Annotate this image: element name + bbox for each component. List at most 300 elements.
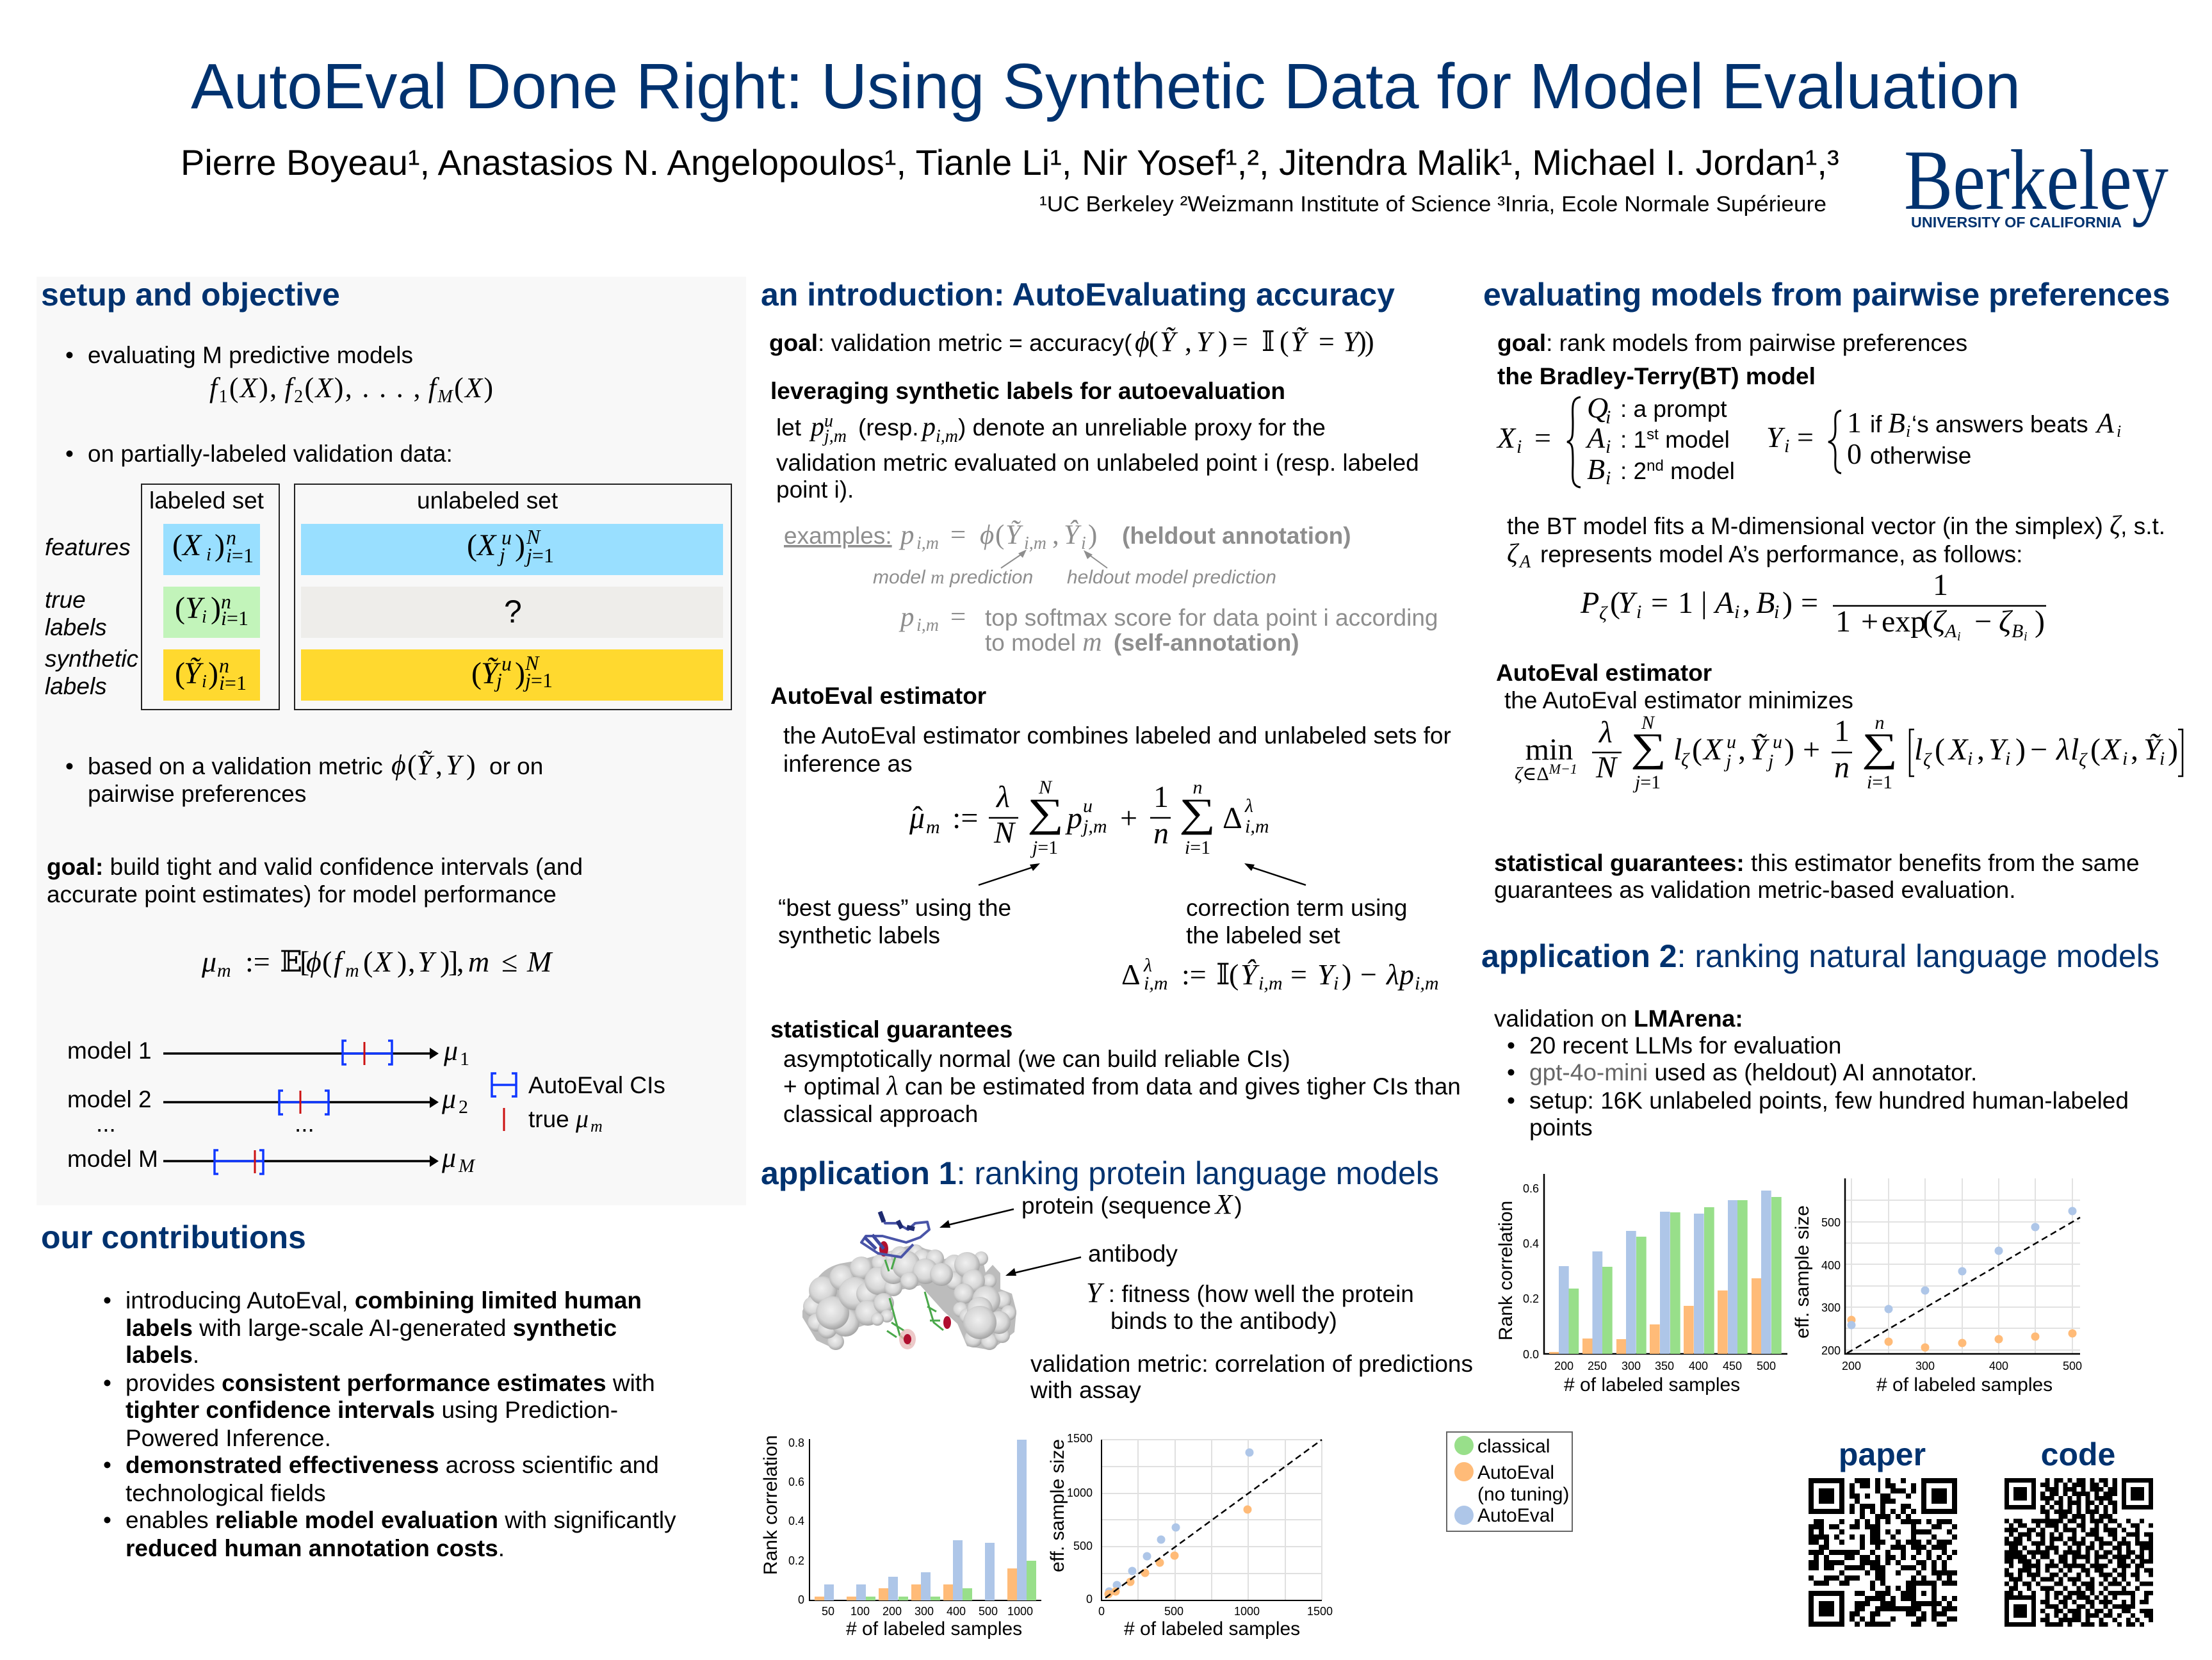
formula: BT probability: B bbox=[2012, 621, 2023, 642]
formula: minimization: i bbox=[2122, 748, 2127, 769]
data table: j bbox=[523, 669, 531, 692]
text: goal accuracy: = bbox=[1319, 326, 1335, 357]
list: contributions: technological fields bbox=[126, 1480, 326, 1506]
block: synthetic labels: j,m bbox=[822, 427, 847, 446]
bullet: validation metric: Ỹ bbox=[416, 749, 435, 781]
list: contributions: demonstrated effectiveness across scientific and bbox=[126, 1452, 659, 1478]
formula: minimization: 1 bbox=[1834, 714, 1850, 748]
bullet: M predictive models: ( bbox=[304, 372, 314, 403]
formula: minimization: + bbox=[1803, 733, 1820, 767]
formula: Y_i definition: i bbox=[1784, 435, 1789, 457]
text: LMArena validation: points bbox=[1529, 1114, 1593, 1141]
formula: mu: := bbox=[245, 945, 270, 978]
text: goal rank: goal: rank models from pairwise preferences bbox=[1497, 330, 1967, 356]
data table: features bbox=[45, 534, 131, 560]
text: goal accuracy: goal: validation metric = accuracy( bbox=[769, 330, 1132, 356]
scatter plot: effective sample size, language models bbox=[1792, 1178, 2082, 1396]
text: goal accuracy: Y bbox=[1196, 326, 1215, 357]
formula: minimization: n bbox=[1875, 712, 1884, 733]
bar chart: rank correlation, protein: 0.2 bbox=[788, 1554, 804, 1567]
formula: BT probability: A bbox=[1713, 586, 1734, 620]
formula: AutoEval mean bbox=[909, 777, 1269, 858]
text: LMArena validation: gpt-4o-mini used as (heldout) AI annotator. bbox=[1529, 1059, 1977, 1086]
scatter plot: effective sample size, protein: 1500 bbox=[1067, 1432, 1093, 1445]
bar chart: rank correlation, protein: 400 bbox=[947, 1605, 966, 1618]
bullet: validation metric: ϕ bbox=[391, 749, 406, 781]
formula: minimization: j=1 bbox=[1632, 772, 1661, 793]
scatter plot: effective sample size, protein: 1500 bbox=[1307, 1605, 1333, 1618]
formula: mu: ) bbox=[397, 945, 407, 978]
scatter plot: effective sample size, protein: 500 bbox=[1164, 1605, 1183, 1618]
formula: AutoEval mean: m bbox=[926, 817, 940, 838]
data table: ) bbox=[515, 656, 525, 690]
arrow: best guess bbox=[979, 863, 1040, 885]
formula: AutoEval mean: p bbox=[1065, 801, 1082, 835]
formula: minimization: i bbox=[2159, 748, 2165, 769]
chart: model confidence intervals: μ bbox=[443, 1035, 458, 1066]
block: examples: examples: bbox=[784, 523, 892, 549]
text: LMArena validation: setup: 16K unlabeled points, few hundred human-labeled bbox=[1529, 1087, 2129, 1114]
formula: BT probability: ( bbox=[1923, 605, 1933, 639]
panel: setup and objective bbox=[37, 277, 746, 1205]
formula: BT probability: = bbox=[1651, 586, 1668, 620]
data table: i bbox=[202, 672, 207, 692]
block: examples: i bbox=[1081, 533, 1086, 553]
list: contributions: introducing AutoEval, combining limited human bbox=[126, 1287, 642, 1314]
scatter plot: effective sample size, protein: # of labeled samples bbox=[1124, 1618, 1300, 1640]
formula: minimization: u bbox=[1773, 731, 1782, 753]
formula: X_i definition: i bbox=[1517, 436, 1522, 457]
data table: j bbox=[494, 669, 502, 692]
block: statistical guarantees: classical approach bbox=[783, 1101, 978, 1127]
formula: BT probability: ) bbox=[1782, 586, 1793, 620]
formula: AutoEval mean: := bbox=[952, 801, 978, 835]
formula: AutoEval mean: λ bbox=[1244, 795, 1253, 817]
formula: BT probability: = bbox=[1801, 586, 1818, 620]
chart: model confidence intervals: ... bbox=[96, 1111, 116, 1137]
formula: BT probability: 1 bbox=[1933, 568, 1948, 602]
formula: AutoEval mean: n bbox=[1153, 817, 1169, 850]
bar chart: rank correlation, protein: 0.8 bbox=[788, 1436, 804, 1449]
formula: minimization: ∑ bbox=[1631, 725, 1666, 770]
formula: minimization: λ bbox=[1598, 715, 1613, 749]
block: examples: p bbox=[899, 520, 915, 550]
block: synthetic labels: validation metric evaluated on unlabeled point i (resp. labeled bbox=[776, 450, 1419, 476]
data table: Y bbox=[185, 591, 205, 625]
data table: N bbox=[525, 651, 540, 674]
formula: X_i definition: A bbox=[1585, 421, 1606, 454]
formula: AutoEval mean: n bbox=[1192, 777, 1203, 798]
chart: model confidence intervals: model M bbox=[67, 1146, 158, 1172]
formula: delta: Y bbox=[1317, 958, 1337, 991]
formula: minimization: ∈Δ bbox=[1522, 763, 1549, 785]
scatter plot: effective sample size, language models: 500 bbox=[1821, 1216, 1841, 1229]
block: examples: ϕ bbox=[980, 520, 994, 550]
block: examples bbox=[784, 520, 1438, 657]
formula: X_i definition: st bbox=[1647, 426, 1659, 443]
data table: ( bbox=[175, 591, 185, 625]
list: contributions: tighter confidence intervals using Prediction- bbox=[126, 1397, 618, 1423]
chart: model confidence intervals: model 1 bbox=[67, 1038, 152, 1064]
logo: Berkeley: UNIVERSITY OF CALIFORNIA bbox=[1911, 214, 2122, 231]
label: correction term: the labeled set bbox=[1186, 922, 1340, 948]
formula: mu: m bbox=[217, 960, 231, 981]
block: synthetic labels: point i). bbox=[776, 476, 854, 503]
formula: Y_i definition: 0 bbox=[1847, 437, 1862, 470]
formula: minimization: l bbox=[1673, 733, 1682, 767]
formula: minimization: ∑ bbox=[1862, 725, 1898, 770]
formula: mu: m bbox=[345, 960, 359, 981]
text: goal accuracy: ( bbox=[1149, 326, 1159, 357]
formula: Y_i definition bbox=[1766, 406, 2121, 473]
text: goal accuracy: , bbox=[1185, 326, 1192, 357]
formula: BT probability: i bbox=[2024, 630, 2028, 644]
formula: minimization: X bbox=[2101, 733, 2122, 767]
formula: X_i definition: i bbox=[1606, 468, 1611, 489]
formula: minimization: j bbox=[1723, 751, 1731, 772]
formula: minimization: , bbox=[1738, 733, 1746, 767]
formula: minimization: X bbox=[1948, 733, 1969, 767]
text: fitness bbox=[1086, 1277, 1414, 1334]
text: LMArena validation: 20 recent LLMs for evaluation bbox=[1529, 1032, 1841, 1059]
formula: BT probability: + bbox=[1861, 605, 1878, 639]
formula: minimization: − bbox=[2030, 733, 2047, 767]
formula: mu: ϕ bbox=[306, 945, 321, 978]
block: examples: to model m (self-annotation) bbox=[985, 628, 1299, 657]
list: contributions: provides consistent performance estimates with bbox=[126, 1370, 655, 1396]
text: validation metric: with assay bbox=[1030, 1377, 1141, 1403]
chart: model confidence intervals: μ bbox=[575, 1104, 589, 1133]
label: best guess: “best guess” using the bbox=[778, 895, 1011, 921]
scatter plot: effective sample size, protein bbox=[1047, 1432, 1333, 1640]
formula: AutoEval mean: N bbox=[993, 816, 1016, 850]
title: AutoEval Done Right: Using Synthetic Data for Model Evaluation bbox=[191, 51, 2021, 122]
arrow: antibody bbox=[1005, 1257, 1081, 1276]
data table: n bbox=[219, 654, 229, 677]
list: contributions: • bbox=[103, 1370, 111, 1396]
block: examples: ) bbox=[1088, 520, 1097, 550]
bullet: M predictive models: evaluating M predictive models bbox=[88, 342, 413, 368]
formula: minimization: ζ bbox=[1681, 749, 1690, 770]
bullet: M predictive models bbox=[65, 342, 493, 407]
text: BT description: A bbox=[1518, 552, 1531, 572]
formula: BT probability: i bbox=[1734, 601, 1739, 622]
formula: minimization: ) bbox=[2168, 733, 2178, 767]
block: examples: Ỹ bbox=[1005, 520, 1023, 550]
list: contributions: • bbox=[103, 1287, 111, 1314]
formula: BT probability: exp bbox=[1882, 605, 1926, 639]
panel: application 1 bbox=[760, 1155, 1473, 1640]
text: goal accuracy: = bbox=[1232, 326, 1248, 357]
QR code: paper bbox=[1809, 1478, 1957, 1627]
formula: mu: , bbox=[457, 945, 464, 978]
label: protein: protein (sequence X) bbox=[1021, 1189, 1242, 1220]
chart: model confidence intervals: μ bbox=[441, 1142, 456, 1173]
bullet: validation metric: ( bbox=[407, 749, 417, 781]
legend: classical bbox=[1477, 1436, 1550, 1457]
bullet: M predictive models: X) bbox=[465, 372, 493, 403]
formula: Y_i definition: i bbox=[1906, 422, 1910, 441]
data table: ( bbox=[172, 528, 183, 562]
formula: mu: X bbox=[373, 945, 393, 978]
formula: minimization: N bbox=[1641, 712, 1655, 733]
formula: Y_i definition: if bbox=[1870, 411, 1882, 437]
list: contributions: labels with large-scale AI-generated synthetic bbox=[126, 1315, 617, 1341]
formula: minimization: ζ bbox=[2079, 749, 2088, 770]
formula: AutoEval mean: Δ bbox=[1223, 801, 1242, 835]
illustration: protein and antibody bbox=[802, 1212, 1016, 1350]
block: examples: i,m bbox=[1024, 533, 1046, 553]
formula: X_i definition bbox=[1496, 391, 1735, 489]
formula: minimization: u bbox=[1727, 731, 1736, 753]
data table: ( bbox=[175, 656, 185, 690]
bar chart: rank correlation, protein: 50 bbox=[822, 1605, 834, 1618]
scatter plot: effective sample size, protein: 0 bbox=[1086, 1593, 1093, 1606]
data table: ( bbox=[471, 656, 482, 690]
formula: minimization bbox=[1515, 712, 2183, 793]
formula: AutoEval mean: ∑ bbox=[1179, 790, 1216, 835]
block: AutoEval estimator pairwise: AutoEval estimator bbox=[1496, 660, 1712, 686]
chart: model confidence intervals: ... bbox=[295, 1111, 314, 1137]
bar chart: rank correlation, language models: 450 bbox=[1723, 1360, 1742, 1372]
block: examples: = bbox=[950, 520, 966, 550]
formula: minimization: Y bbox=[1988, 733, 2008, 767]
block: synthetic labels: i,m bbox=[936, 427, 958, 446]
bar chart: rank correlation, language models: 0.4 bbox=[1523, 1237, 1539, 1250]
formula: AutoEval mean: λ bbox=[995, 780, 1010, 814]
formula: Y_i definition: 1 bbox=[1847, 406, 1862, 439]
data table: i bbox=[202, 607, 207, 627]
list: contributions: labels. bbox=[126, 1342, 199, 1368]
formula: AutoEval mean: + bbox=[1120, 801, 1137, 835]
formula: BT probability: , bbox=[1743, 586, 1750, 620]
formula: minimization: i bbox=[2005, 748, 2010, 769]
data table: Ỹ bbox=[184, 656, 204, 690]
bullet: M predictive models: 1 bbox=[219, 387, 228, 407]
formula: mu: Y bbox=[418, 945, 437, 978]
formula: delta: i,m bbox=[1415, 973, 1438, 994]
logo: Berkeley: Berkeley bbox=[1904, 133, 2168, 227]
block: statistical guarantees bbox=[770, 1016, 1461, 1127]
arrow: protein bbox=[939, 1209, 1014, 1228]
block: examples: model m prediction bbox=[873, 567, 1033, 588]
data table: labeled set bbox=[149, 487, 264, 514]
label: correction term bbox=[1186, 895, 1407, 948]
formula: BT probability: i bbox=[1957, 630, 1961, 644]
bar chart: rank correlation, protein: 0 bbox=[798, 1593, 804, 1606]
formula: minimization: ( bbox=[2090, 733, 2101, 767]
formula: mu: ( bbox=[363, 945, 373, 978]
data table bbox=[45, 484, 731, 710]
formula: delta: p bbox=[1397, 958, 1414, 991]
formula: delta: := bbox=[1182, 958, 1207, 991]
block: synthetic labels: ) denote an unreliable proxy for the bbox=[958, 414, 1326, 441]
data table: i bbox=[219, 671, 225, 694]
formula: minimization: N bbox=[1595, 751, 1618, 785]
heading: pairwise preferences: evaluating models from pairwise preferences bbox=[1483, 277, 2170, 313]
chart: model confidence intervals: AutoEval CIs bbox=[528, 1072, 665, 1098]
formula: mu: ( bbox=[322, 945, 332, 978]
formula: AutoEval mean: ∑ bbox=[1027, 790, 1064, 835]
bullet: validation data: on partially-labeled validation data: bbox=[88, 441, 453, 467]
bullet: M predictive models: ( bbox=[454, 372, 464, 403]
formula: delta: λ bbox=[1143, 955, 1152, 976]
bar chart: rank correlation, protein: Rank correlation bbox=[760, 1435, 781, 1575]
block: examples: (heldout annotation) bbox=[1122, 523, 1351, 549]
data table: X bbox=[181, 528, 202, 562]
data table: i bbox=[226, 544, 232, 567]
list: contributions: reduced human annotation costs. bbox=[126, 1535, 505, 1561]
formula: delta: i bbox=[1333, 973, 1338, 994]
data table: j bbox=[497, 543, 505, 566]
formula: X_i definition: model bbox=[1659, 427, 1730, 453]
list: contributions: Powered Inference. bbox=[126, 1425, 331, 1451]
data table: ) bbox=[211, 591, 221, 625]
formula: BT probability: A bbox=[1944, 621, 1957, 642]
bullet: M predictive models: • bbox=[65, 342, 74, 368]
text: goal accuracy: ϕ bbox=[1135, 326, 1150, 357]
block: examples: , bbox=[1052, 520, 1059, 550]
heading: application 1: application 1: ranking protein language models bbox=[761, 1155, 1439, 1191]
block: statistical guarantees: + optimal λ can be estimated from data and gives tigher CIs than bbox=[783, 1071, 1461, 1101]
formula: Y_i definition: A bbox=[2095, 407, 2115, 439]
legend bbox=[1447, 1432, 1572, 1531]
bar chart: rank correlation, protein: 200 bbox=[882, 1605, 902, 1618]
text: BT description: the BT model fits a M-dimensional vector (in the simplex) ζ, s.t. bbox=[1507, 511, 2165, 541]
formula: X_i definition: i bbox=[1606, 407, 1611, 428]
panel: pairwise preferences bbox=[1447, 277, 2183, 1627]
bar chart: rank correlation, protein: 0.6 bbox=[788, 1476, 804, 1488]
text: goal accuracy: ) bbox=[1218, 326, 1228, 357]
data table: labels bbox=[45, 614, 107, 640]
heading: our contributions: our contributions bbox=[41, 1219, 306, 1255]
formula: AutoEval mean: i,m bbox=[1245, 816, 1269, 837]
block: synthetic labels: (resp. bbox=[858, 414, 919, 441]
bar chart: rank correlation, protein: # of labeled samples bbox=[846, 1618, 1022, 1640]
formula: minimization: , bbox=[1977, 733, 1985, 767]
legend: (no tuning) bbox=[1477, 1484, 1569, 1505]
formula: mu: f bbox=[334, 945, 346, 978]
formula: X_i definition: : 1 bbox=[1620, 427, 1647, 453]
formula: BT probability: ( bbox=[1610, 586, 1620, 620]
formula: delta: Ŷ bbox=[1240, 958, 1260, 991]
text: fitness: binds to the antibody) bbox=[1110, 1308, 1337, 1334]
bar chart: rank correlation, language models: 250 bbox=[1588, 1360, 1607, 1372]
formula: BT probability: 1 bbox=[1835, 605, 1851, 639]
formula: mu: [ bbox=[300, 945, 309, 978]
block: synthetic labels: u bbox=[824, 411, 833, 431]
text: goal accuracy: Ỹ bbox=[1290, 326, 1309, 357]
data table: N bbox=[526, 525, 541, 548]
block: AutoEval estimator pairwise: the AutoEval estimator minimizes bbox=[1504, 687, 1853, 713]
text: LMArena validation: • bbox=[1507, 1087, 1515, 1114]
block: AutoEval estimator bbox=[770, 683, 1451, 777]
formula: BT probability: ζ bbox=[1599, 603, 1608, 624]
text: BT description bbox=[1507, 511, 2165, 572]
text: goal accuracy: ( bbox=[1280, 326, 1289, 357]
data table: i bbox=[221, 606, 227, 630]
legend: AutoEval bbox=[1477, 1462, 1554, 1483]
formula: BT probability: ζ bbox=[1999, 605, 2013, 639]
formula: X_i definition: i bbox=[1606, 436, 1611, 457]
data table: ( bbox=[467, 528, 477, 562]
formula: BT probability: i bbox=[1636, 601, 1641, 622]
bullet: validation metric: • bbox=[65, 753, 74, 779]
authors: Pierre Boyeau¹, Anastasios N. Angelopoulos¹, Tianle Li¹, Nir Yosef¹,², Jitendra Malik¹, Michael I. Jordan¹,³ bbox=[181, 142, 1839, 183]
data table: =1 bbox=[532, 544, 554, 567]
data table: j bbox=[524, 544, 532, 567]
panel: our contributions bbox=[41, 1219, 676, 1561]
text: LMArena validation: validation on LMArena: bbox=[1494, 1005, 1743, 1032]
formula: BT probability: ζ bbox=[1933, 605, 1948, 639]
formula: AutoEval mean: 1 bbox=[1153, 780, 1169, 814]
formula: X_i definition: nd bbox=[1647, 457, 1664, 475]
formula: X_i definition: X bbox=[1496, 421, 1517, 454]
bar chart: rank correlation, language models: 200 bbox=[1554, 1360, 1574, 1372]
list: contributions: • bbox=[103, 1507, 111, 1533]
chart: model confidence intervals: 2 bbox=[459, 1096, 468, 1118]
formula: minimization: X bbox=[1702, 733, 1723, 767]
bar chart: rank correlation, protein bbox=[760, 1435, 1041, 1640]
formula: minimization: ( bbox=[1935, 733, 1945, 767]
bullet: M predictive models: ( bbox=[229, 372, 239, 403]
data table: X bbox=[476, 528, 497, 562]
text: BT description: ζ bbox=[1507, 539, 1520, 569]
bullet: validation metric bbox=[65, 749, 543, 807]
formula: delta: = bbox=[1290, 958, 1307, 991]
formula: AutoEval mean: N bbox=[1038, 777, 1053, 798]
data table: ) bbox=[515, 528, 525, 562]
text: goal: accurate point estimates) for model performance bbox=[47, 881, 557, 907]
QR code: code bbox=[2005, 1478, 2153, 1627]
formula: X_i definition: B bbox=[1587, 453, 1605, 485]
data table: n bbox=[226, 526, 236, 549]
formula: minimization: n bbox=[1834, 751, 1850, 785]
formula: BT probability bbox=[1580, 568, 2046, 644]
formula: delta: − bbox=[1360, 958, 1377, 991]
text: goal accuracy: ) bbox=[1365, 326, 1374, 357]
bar chart: rank correlation, protein: 300 bbox=[915, 1605, 934, 1618]
data table: labels bbox=[45, 673, 107, 699]
block: synthetic labels: p bbox=[809, 412, 824, 442]
formula: delta: i,m bbox=[1258, 973, 1282, 994]
text: BT description: represents model A’s performance, as follows: bbox=[1540, 541, 2022, 567]
formula: mu: 𝔼 bbox=[280, 945, 302, 978]
scatter plot: effective sample size, language models: 300 bbox=[1821, 1301, 1841, 1314]
scatter plot: effective sample size, protein: 0 bbox=[1098, 1605, 1105, 1618]
formula: AutoEval mean: u bbox=[1083, 795, 1093, 817]
block: statistical guarantees: statistical guarantees bbox=[770, 1016, 1012, 1043]
block: examples: Ŷ bbox=[1064, 520, 1082, 550]
formula: minimization: i=1 bbox=[1867, 772, 1892, 793]
bar chart: rank correlation, language models bbox=[1495, 1174, 1787, 1396]
data table: =1 bbox=[227, 606, 248, 630]
data table: =1 bbox=[531, 669, 553, 692]
formula: Y_i definition: ‘s answers beats bbox=[1912, 411, 2088, 437]
bar chart: rank correlation, language models: 500 bbox=[1757, 1360, 1776, 1372]
data table: unlabeled set bbox=[417, 487, 558, 514]
formula: delta: 𝕀 bbox=[1216, 958, 1230, 991]
block: statistical guarantees: asymptotically normal (we can build reliable CIs) bbox=[783, 1046, 1290, 1072]
scatter plot: effective sample size, language models: 400 bbox=[1821, 1259, 1841, 1272]
data table: ) bbox=[208, 656, 218, 690]
formula: X_i definition: : 2 bbox=[1620, 458, 1647, 484]
heading: application 2: application 2: ranking natural language models bbox=[1481, 938, 2159, 974]
scatter plot: effective sample size, language models: 200 bbox=[1842, 1360, 1861, 1372]
heading: introduction: an introduction: AutoEvaluating accuracy bbox=[761, 277, 1395, 313]
formula: BT probability: ) bbox=[2035, 605, 2045, 639]
affiliations: ¹UC Berkeley ²Weizmann Institute of Science ³Inria, Ecole Normale Supérieure bbox=[1039, 192, 1826, 216]
